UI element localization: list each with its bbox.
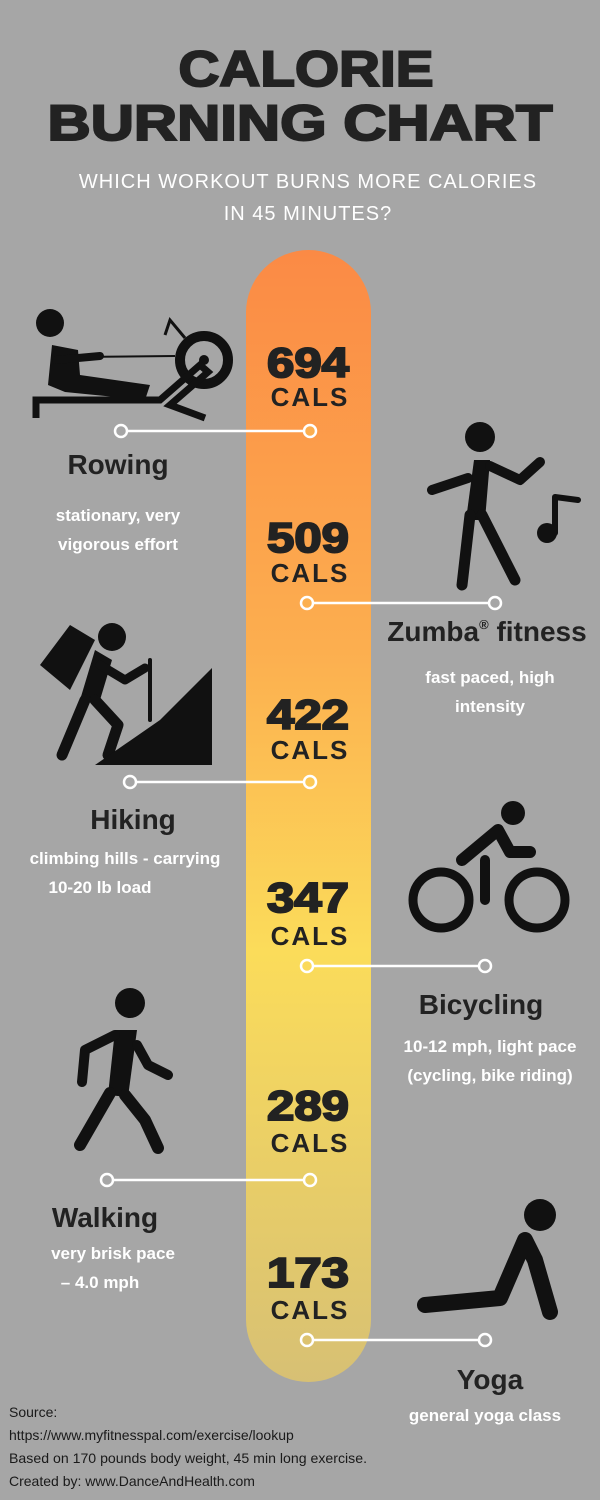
activity names: Yoga [457, 1364, 524, 1395]
calorie values: 347 [267, 874, 349, 921]
subtitle: WHICH WORKOUT BURNS MORE CALORIES [79, 171, 537, 193]
activity names: Rowing [67, 449, 169, 480]
title: CALORIE [178, 41, 434, 97]
calorie values: 289 [267, 1082, 349, 1129]
source: Created by: www.DanceAndHealth.com [9, 1473, 255, 1489]
activity names: Bicycling [419, 989, 543, 1020]
calorie values: CALS [271, 1128, 349, 1158]
connectors [101, 425, 501, 1346]
activity names: Hiking [90, 804, 176, 835]
icon: yoga [425, 1199, 556, 1312]
calorie values: 173 [267, 1249, 349, 1296]
descriptions: stationary, very [56, 506, 181, 525]
descriptions: fast paced, high [425, 668, 555, 687]
calorie values: CALS [271, 1295, 349, 1325]
source [9, 1404, 367, 1489]
source: https://www.myfitnesspal.com/exercise/lookup [9, 1427, 294, 1443]
calorie values: 422 [267, 691, 349, 738]
activity names: Zumba [387, 616, 479, 647]
activity names: ® [479, 617, 489, 632]
activity names: Walking [52, 1202, 158, 1233]
calorie values: CALS [271, 382, 349, 412]
icon: zumba dancer [432, 422, 578, 585]
calorie values: CALS [271, 735, 349, 765]
calorie values: CALS [271, 558, 349, 588]
gradient bar [246, 250, 371, 1382]
icon: hiker [40, 623, 212, 765]
calorie values: CALS [271, 921, 349, 951]
descriptions: (cycling, bike riding) [407, 1066, 573, 1085]
descriptions: 10-12 mph, light pace [404, 1037, 576, 1056]
subtitle [79, 171, 537, 225]
icon: bicycle [413, 801, 565, 928]
subtitle: IN 45 MINUTES? [224, 203, 392, 225]
calorie values [267, 339, 350, 1325]
calorie values: 694 [267, 339, 350, 386]
icon: rowing [36, 309, 228, 418]
descriptions: – 4.0 mph [61, 1273, 139, 1292]
title: BURNING CHART [48, 95, 552, 151]
descriptions: intensity [455, 697, 525, 716]
source: Source: [9, 1404, 57, 1420]
descriptions: vigorous effort [58, 535, 178, 554]
descriptions: general yoga class [409, 1406, 561, 1425]
descriptions: very brisk pace [51, 1244, 175, 1263]
activity names: fitness [489, 616, 587, 647]
descriptions [30, 506, 576, 1425]
calorie values: 509 [267, 514, 349, 561]
descriptions: climbing hills - carrying [30, 849, 220, 868]
title [48, 41, 552, 151]
activity names [52, 449, 587, 1395]
source: Based on 170 pounds body weight, 45 min long exercise. [9, 1450, 367, 1466]
descriptions: 10-20 lb load [49, 878, 151, 897]
icon: walker [80, 988, 168, 1148]
